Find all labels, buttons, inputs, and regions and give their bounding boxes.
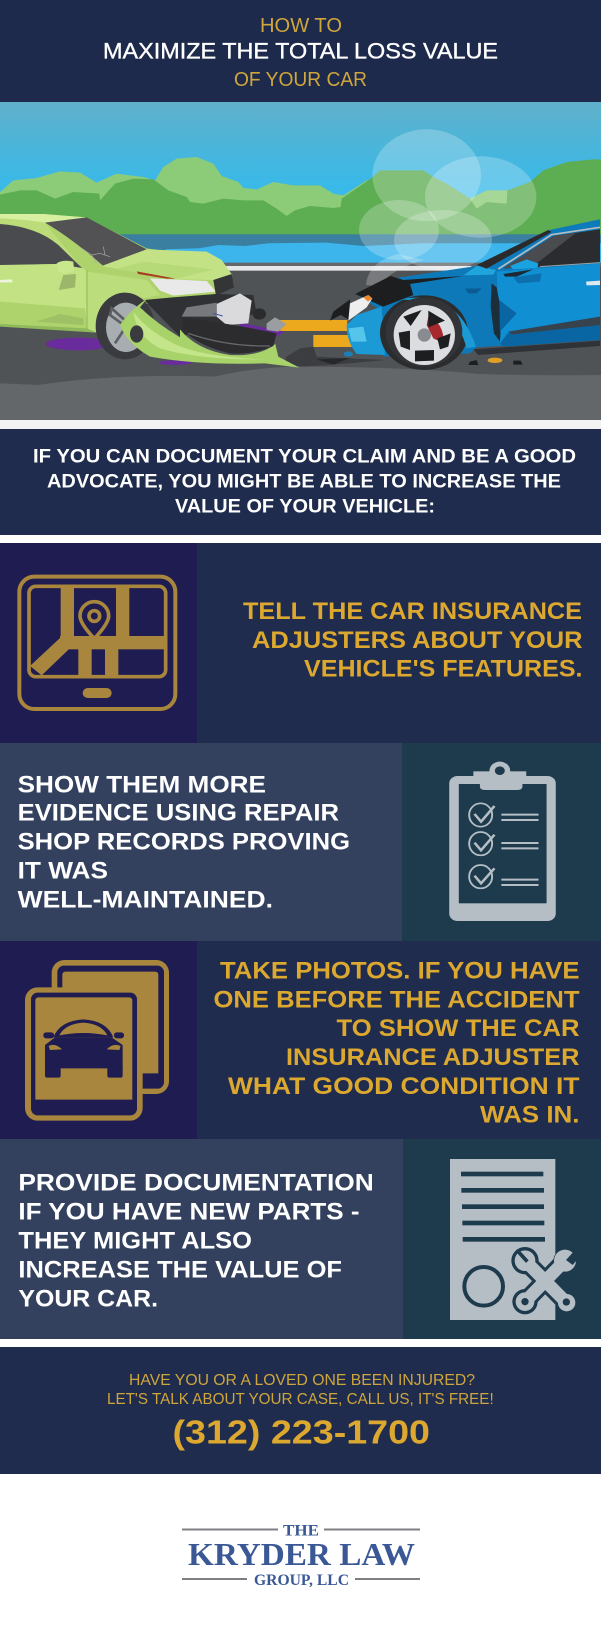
text: tip 1: VEHICLE'S FEATURES. — [304, 656, 582, 683]
logo: The Kryder Law Group: GROUP, LLC — [254, 1572, 349, 1589]
panel: intro — [0, 429, 601, 535]
icon: photos with car — [25, 960, 169, 1121]
text: tip 3: TO SHOW THE CAR — [336, 1015, 580, 1042]
intro text: ADVOCATE, YOU MIGHT BE ABLE TO INCREASE THE — [47, 470, 561, 492]
text: tip 4: THEY MIGHT ALSO — [18, 1227, 252, 1254]
panel: header — [0, 0, 601, 102]
text: tip 4: YOUR CAR. — [18, 1286, 158, 1313]
blue car — [300, 219, 600, 370]
intro text — [33, 445, 576, 517]
text: tip 3: ONE BEFORE THE ACCIDENT — [214, 986, 580, 1013]
icon: clipboard — [449, 762, 556, 921]
intro text: VALUE OF YOUR VEHICLE: — [175, 495, 435, 517]
text: call to action: LET'S TALK ABOUT YOUR CASE, CALL US, IT'S FREE! — [107, 1391, 494, 1408]
green car — [0, 214, 300, 368]
text: call to action — [107, 1372, 494, 1408]
text: tip 3: WHAT GOOD CONDITION IT — [228, 1073, 580, 1100]
text: tip 1 — [243, 598, 582, 683]
illustration: car crash scene — [0, 102, 601, 423]
text: tip 4: INCREASE THE VALUE OF — [18, 1257, 342, 1284]
text: tip 3: TAKE PHOTOS. IF YOU HAVE — [220, 958, 580, 985]
text: tip 2: WELL-MAINTAINED. — [18, 886, 273, 913]
text: tip 3: WAS IN. — [480, 1102, 580, 1129]
text: tip 1: ADJUSTERS ABOUT YOUR — [252, 627, 582, 654]
phone number: (312) 223-1700 — [172, 1413, 430, 1450]
text: tip 2 — [18, 772, 350, 913]
text: tip 2: SHOP RECORDS PROVING — [18, 828, 350, 855]
logo: The Kryder Law Group: KRYDER LAW — [188, 1536, 415, 1572]
text: call to action: HAVE YOU OR A LOVED ONE BEEN INJURED? — [129, 1372, 475, 1389]
text: tip 3 — [214, 958, 580, 1129]
text: tip 2: IT WAS — [18, 857, 108, 884]
text: tip 4 — [18, 1170, 374, 1313]
smoke — [359, 129, 536, 286]
panel: tip 2 evidence — [0, 743, 601, 941]
text: tip 2: SHOW THEM MORE — [18, 772, 266, 799]
panel: tip 4 documentation — [0, 1139, 601, 1339]
icon: map tablet — [19, 577, 175, 709]
icon: document with tools — [450, 1159, 578, 1320]
text: tip 3: INSURANCE ADJUSTER — [286, 1044, 580, 1071]
heading: of your car: OF YOUR CAR — [234, 69, 367, 91]
heading: main title: MAXIMIZE THE TOTAL LOSS VALUE — [103, 38, 498, 63]
logo: The Kryder Law Group — [182, 1523, 420, 1589]
intro text: IF YOU CAN DOCUMENT YOUR CLAIM AND BE A GOOD — [33, 445, 576, 467]
text: tip 2: EVIDENCE USING REPAIR — [18, 800, 339, 827]
text: tip 1: TELL THE CAR INSURANCE — [243, 598, 582, 625]
panel: call to action — [0, 1347, 601, 1474]
panel: tip 1 features — [0, 543, 601, 743]
logo: The Kryder Law Group: THE — [283, 1523, 319, 1540]
panel: tip 3 photos — [0, 941, 601, 1139]
heading: how to: HOW TO — [260, 15, 342, 37]
icon: road markings — [273, 320, 352, 347]
text: tip 4: PROVIDE DOCUMENTATION — [18, 1170, 374, 1197]
text: tip 4: IF YOU HAVE NEW PARTS - — [18, 1198, 360, 1225]
